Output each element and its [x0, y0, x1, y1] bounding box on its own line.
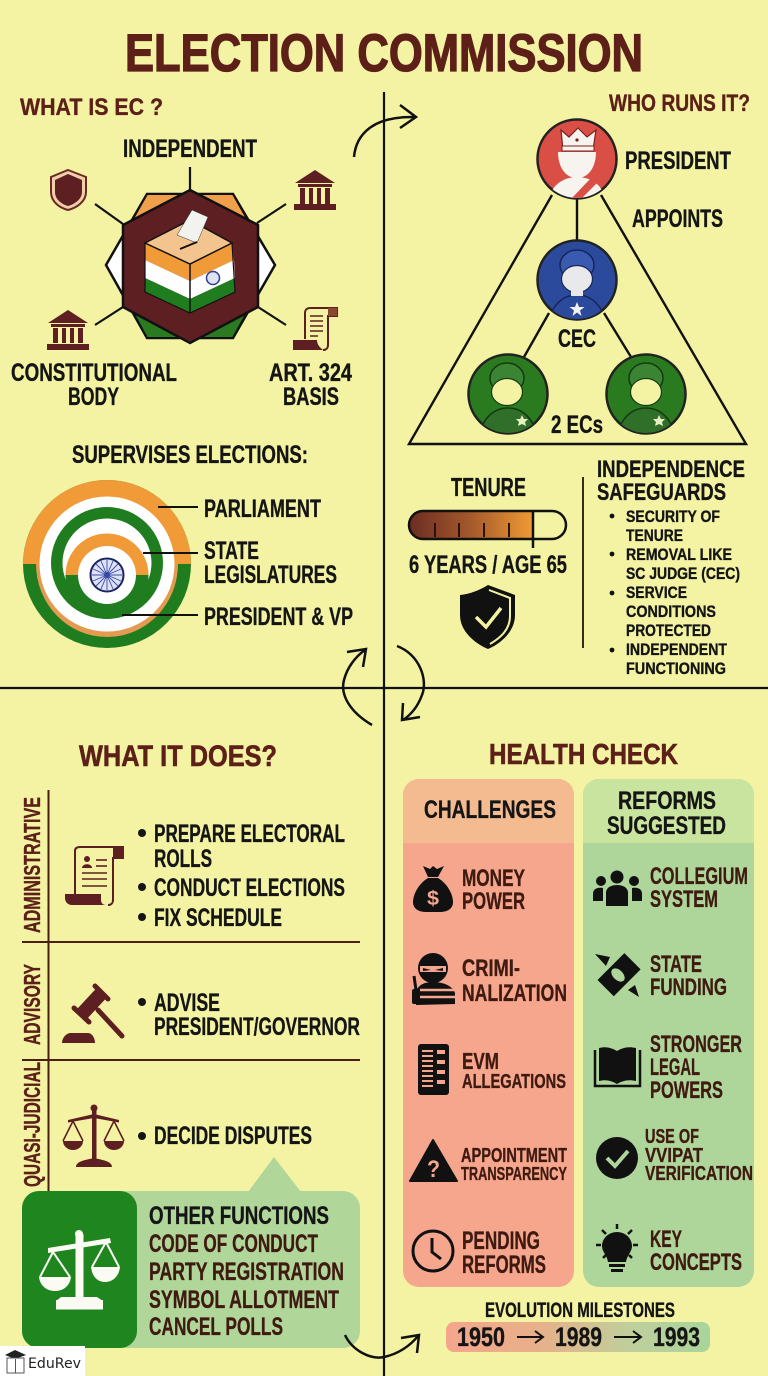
heading: evolution milestones: EVOLUTION MILESTONES — [485, 1299, 675, 1322]
chart: concentric tricolour rings — [23, 480, 191, 648]
divider between tenure and safeguards — [582, 477, 584, 648]
panel: health check — [403, 739, 754, 1287]
icon: electoral roll document — [65, 847, 123, 905]
text: appointment transparency: TRANSPARENCY — [461, 1164, 567, 1184]
text: administrative functions — [154, 820, 345, 932]
text: money power: MONEY — [462, 865, 525, 892]
heading: what is EC: WHAT IS EC ? — [20, 94, 163, 121]
text: collegium system — [650, 863, 748, 913]
text: appointment transparency: APPOINTMENT — [461, 1145, 567, 1167]
table rules — [22, 790, 360, 1192]
title: ELECTION COMMISSION — [125, 24, 643, 83]
icon: ec left — [467, 353, 549, 435]
text: stronger legal powers — [650, 1031, 742, 1104]
text: appointment transparency — [461, 1145, 567, 1184]
text: use of vvipat verification: VVIPAT — [645, 1145, 703, 1167]
heading: health check: HEALTH CHECK — [489, 739, 678, 771]
text: money power: POWER — [462, 888, 525, 915]
text: advisory functions: ADVISE — [154, 989, 220, 1017]
leader lines — [122, 507, 198, 615]
function bullets — [138, 829, 146, 1140]
text: state funding: STATE — [650, 951, 702, 978]
text: administrative functions: CONDUCT ELECTIONS — [154, 874, 345, 902]
arrow: centre right curve — [397, 646, 424, 720]
icon: money bag: $ — [427, 888, 439, 910]
label: president: PRESIDENT — [625, 147, 731, 175]
label: independent: INDEPENDENT — [123, 135, 257, 163]
milestone years: 1989 — [555, 1322, 602, 1352]
safeguard list text: TENURE — [626, 526, 683, 545]
milestone arrows — [517, 1331, 641, 1343]
list bullets — [610, 514, 614, 652]
text: advisory functions — [154, 989, 360, 1041]
text: other functions heading: OTHER FUNCTIONS — [149, 1202, 329, 1230]
safeguard list text: SC JUDGE (CEC) — [626, 564, 740, 583]
icon: ballot box emblem — [106, 190, 275, 343]
label: quasi-judicial: QUASI-JUDICIAL — [19, 1062, 45, 1187]
label: president and vp: PRESIDENT & VP — [204, 603, 353, 631]
text: stronger legal powers: LEGAL — [650, 1054, 700, 1081]
safeguard list text: PROTECTED — [626, 621, 711, 640]
label: cec: CEC — [558, 325, 596, 353]
icon: bank lower left — [47, 310, 89, 350]
icon: open book — [595, 1047, 640, 1086]
panel: supervises elections — [23, 441, 353, 648]
connector spokes — [95, 167, 286, 325]
text: pending reforms: PENDING — [462, 1227, 540, 1255]
text: criminalization: NALIZATION — [462, 980, 567, 1007]
icon: warning question: ? — [427, 1156, 440, 1183]
value: six years or age 65: 6 YEARS / AGE 65 — [409, 551, 567, 579]
label: art 324 basis — [269, 359, 352, 411]
text: other functions list: SYMBOL ALLOTMENT — [149, 1286, 339, 1314]
text: advisory functions: PRESIDENT/GOVERNOR — [154, 1013, 360, 1041]
safeguard list text: INDEPENDENT — [626, 640, 728, 659]
label: advisory: ADVISORY — [19, 964, 45, 1045]
arrow: centre left curve — [343, 649, 372, 725]
callout: other functions — [22, 1157, 360, 1348]
text: state funding: FUNDING — [650, 974, 727, 1001]
timeline: evolution milestones — [446, 1299, 710, 1352]
text: key concepts — [650, 1226, 742, 1276]
panel: tenure — [409, 472, 567, 649]
heading: what it does: WHAT IT DOES? — [79, 740, 277, 773]
icon: ec right — [605, 353, 687, 435]
text: evm allegations — [462, 1048, 566, 1093]
heading: tenure: TENURE — [451, 472, 526, 502]
text: key concepts: KEY — [650, 1226, 682, 1253]
text: other functions list: PARTY REGISTRATION — [149, 1258, 344, 1286]
label: appoints: APPOINTS — [632, 205, 723, 233]
icon: shield check — [460, 585, 515, 649]
icon: gavel — [62, 986, 122, 1043]
icon: masked criminal — [412, 953, 455, 1005]
text: other functions list — [149, 1230, 344, 1341]
panel: what is EC — [11, 94, 352, 411]
panel: challenges — [403, 779, 574, 1287]
hierarchy triangle — [409, 195, 746, 444]
label: administrative: ADMINISTRATIVE — [19, 797, 45, 933]
label: 2 ECs: 2 ECs — [551, 411, 603, 439]
text: criminalization: CRIMI- — [462, 955, 520, 982]
text: pending reforms: REFORMS — [462, 1251, 546, 1279]
text: collegium system: SYSTEM — [650, 886, 718, 913]
text: evm allegations: EVM — [462, 1048, 499, 1074]
safeguard list text: FUNCTIONING — [626, 659, 726, 678]
icon: scroll — [293, 308, 337, 350]
icon: clock — [413, 1231, 453, 1271]
icon: warning question — [410, 1140, 457, 1183]
heading: reforms suggested — [607, 787, 726, 840]
text: use of vvipat verification: USE OF — [645, 1126, 699, 1148]
safeguard list text: SECURITY OF — [626, 507, 720, 526]
arrow: bottom curve — [345, 1335, 419, 1358]
label: art 324 basis: BASIS — [283, 383, 339, 411]
logo: EduRev — [0, 1346, 85, 1376]
icon: shield — [51, 170, 86, 210]
safeguard list text: SERVICE — [626, 583, 687, 602]
milestone years: 1993 — [653, 1322, 700, 1352]
label: constitutional body: CONSTITUTIONAL — [11, 359, 177, 387]
label: parliament: PARLIAMENT — [204, 495, 321, 523]
logo: EduRev: EduRev — [28, 1356, 81, 1372]
heading: independence safeguards: SAFEGUARDS — [597, 479, 726, 506]
panel: what it does — [19, 740, 360, 1192]
chart: tenure gauge — [409, 510, 566, 548]
heading: reforms suggested: REFORMS — [618, 787, 716, 815]
text: other functions list: CANCEL POLLS — [149, 1313, 283, 1341]
icon: cec — [536, 239, 618, 321]
text: other functions list: CODE OF CONDUCT — [149, 1230, 318, 1258]
heading: challenges: CHALLENGES — [424, 796, 556, 824]
panel: independence safeguards — [597, 456, 745, 678]
label: constitutional body — [11, 359, 177, 411]
text: administrative functions: ROLLS — [154, 845, 212, 873]
panel: who runs it — [409, 90, 750, 462]
label: constitutional body: BODY — [68, 383, 119, 411]
icon: bank upper right — [294, 170, 336, 210]
safeguard list text: REMOVAL LIKE — [626, 545, 732, 564]
label: state legislatures: LEGISLATURES — [204, 561, 337, 589]
safeguard list text: CONDITIONS — [626, 602, 716, 621]
label: state legislatures: STATE — [204, 537, 259, 565]
icon: evm machine — [418, 1044, 449, 1095]
heading: independence safeguards — [597, 456, 745, 506]
text: administrative functions: PREPARE ELECTORAL — [154, 820, 345, 848]
text: stronger legal powers: POWERS — [650, 1077, 723, 1104]
label: state legislatures — [204, 537, 337, 589]
safeguard list text — [626, 507, 740, 678]
text: state funding — [650, 951, 727, 1001]
heading: supervises elections: SUPERVISES ELECTIONS: — [72, 441, 308, 469]
arrow: top curve — [354, 105, 416, 157]
icon: check circle — [596, 1137, 638, 1179]
milestone years — [457, 1322, 700, 1352]
icon: state funding money — [595, 953, 641, 997]
text: money power — [462, 865, 525, 915]
panel: reforms suggested — [583, 779, 754, 1287]
icon: collegium people — [593, 870, 642, 906]
text: use of vvipat verification — [645, 1126, 753, 1185]
text: evm allegations: ALLEGATIONS — [462, 1071, 566, 1093]
text: quasi-judicial functions: DECIDE DISPUTES — [154, 1122, 312, 1150]
icon: president — [538, 120, 616, 200]
text: pending reforms — [462, 1227, 546, 1279]
text: criminalization — [462, 955, 567, 1007]
text: administrative functions: FIX SCHEDULE — [154, 904, 282, 932]
label: art 324 basis: ART. 324 — [269, 359, 352, 387]
milestone years: 1950 — [457, 1322, 505, 1352]
icon: scales — [63, 1104, 124, 1167]
icon: light bulb — [596, 1224, 638, 1272]
heading: reforms suggested: SUGGESTED — [607, 812, 726, 840]
icon: money bag — [413, 866, 453, 912]
icon: white scales — [39, 1230, 120, 1310]
